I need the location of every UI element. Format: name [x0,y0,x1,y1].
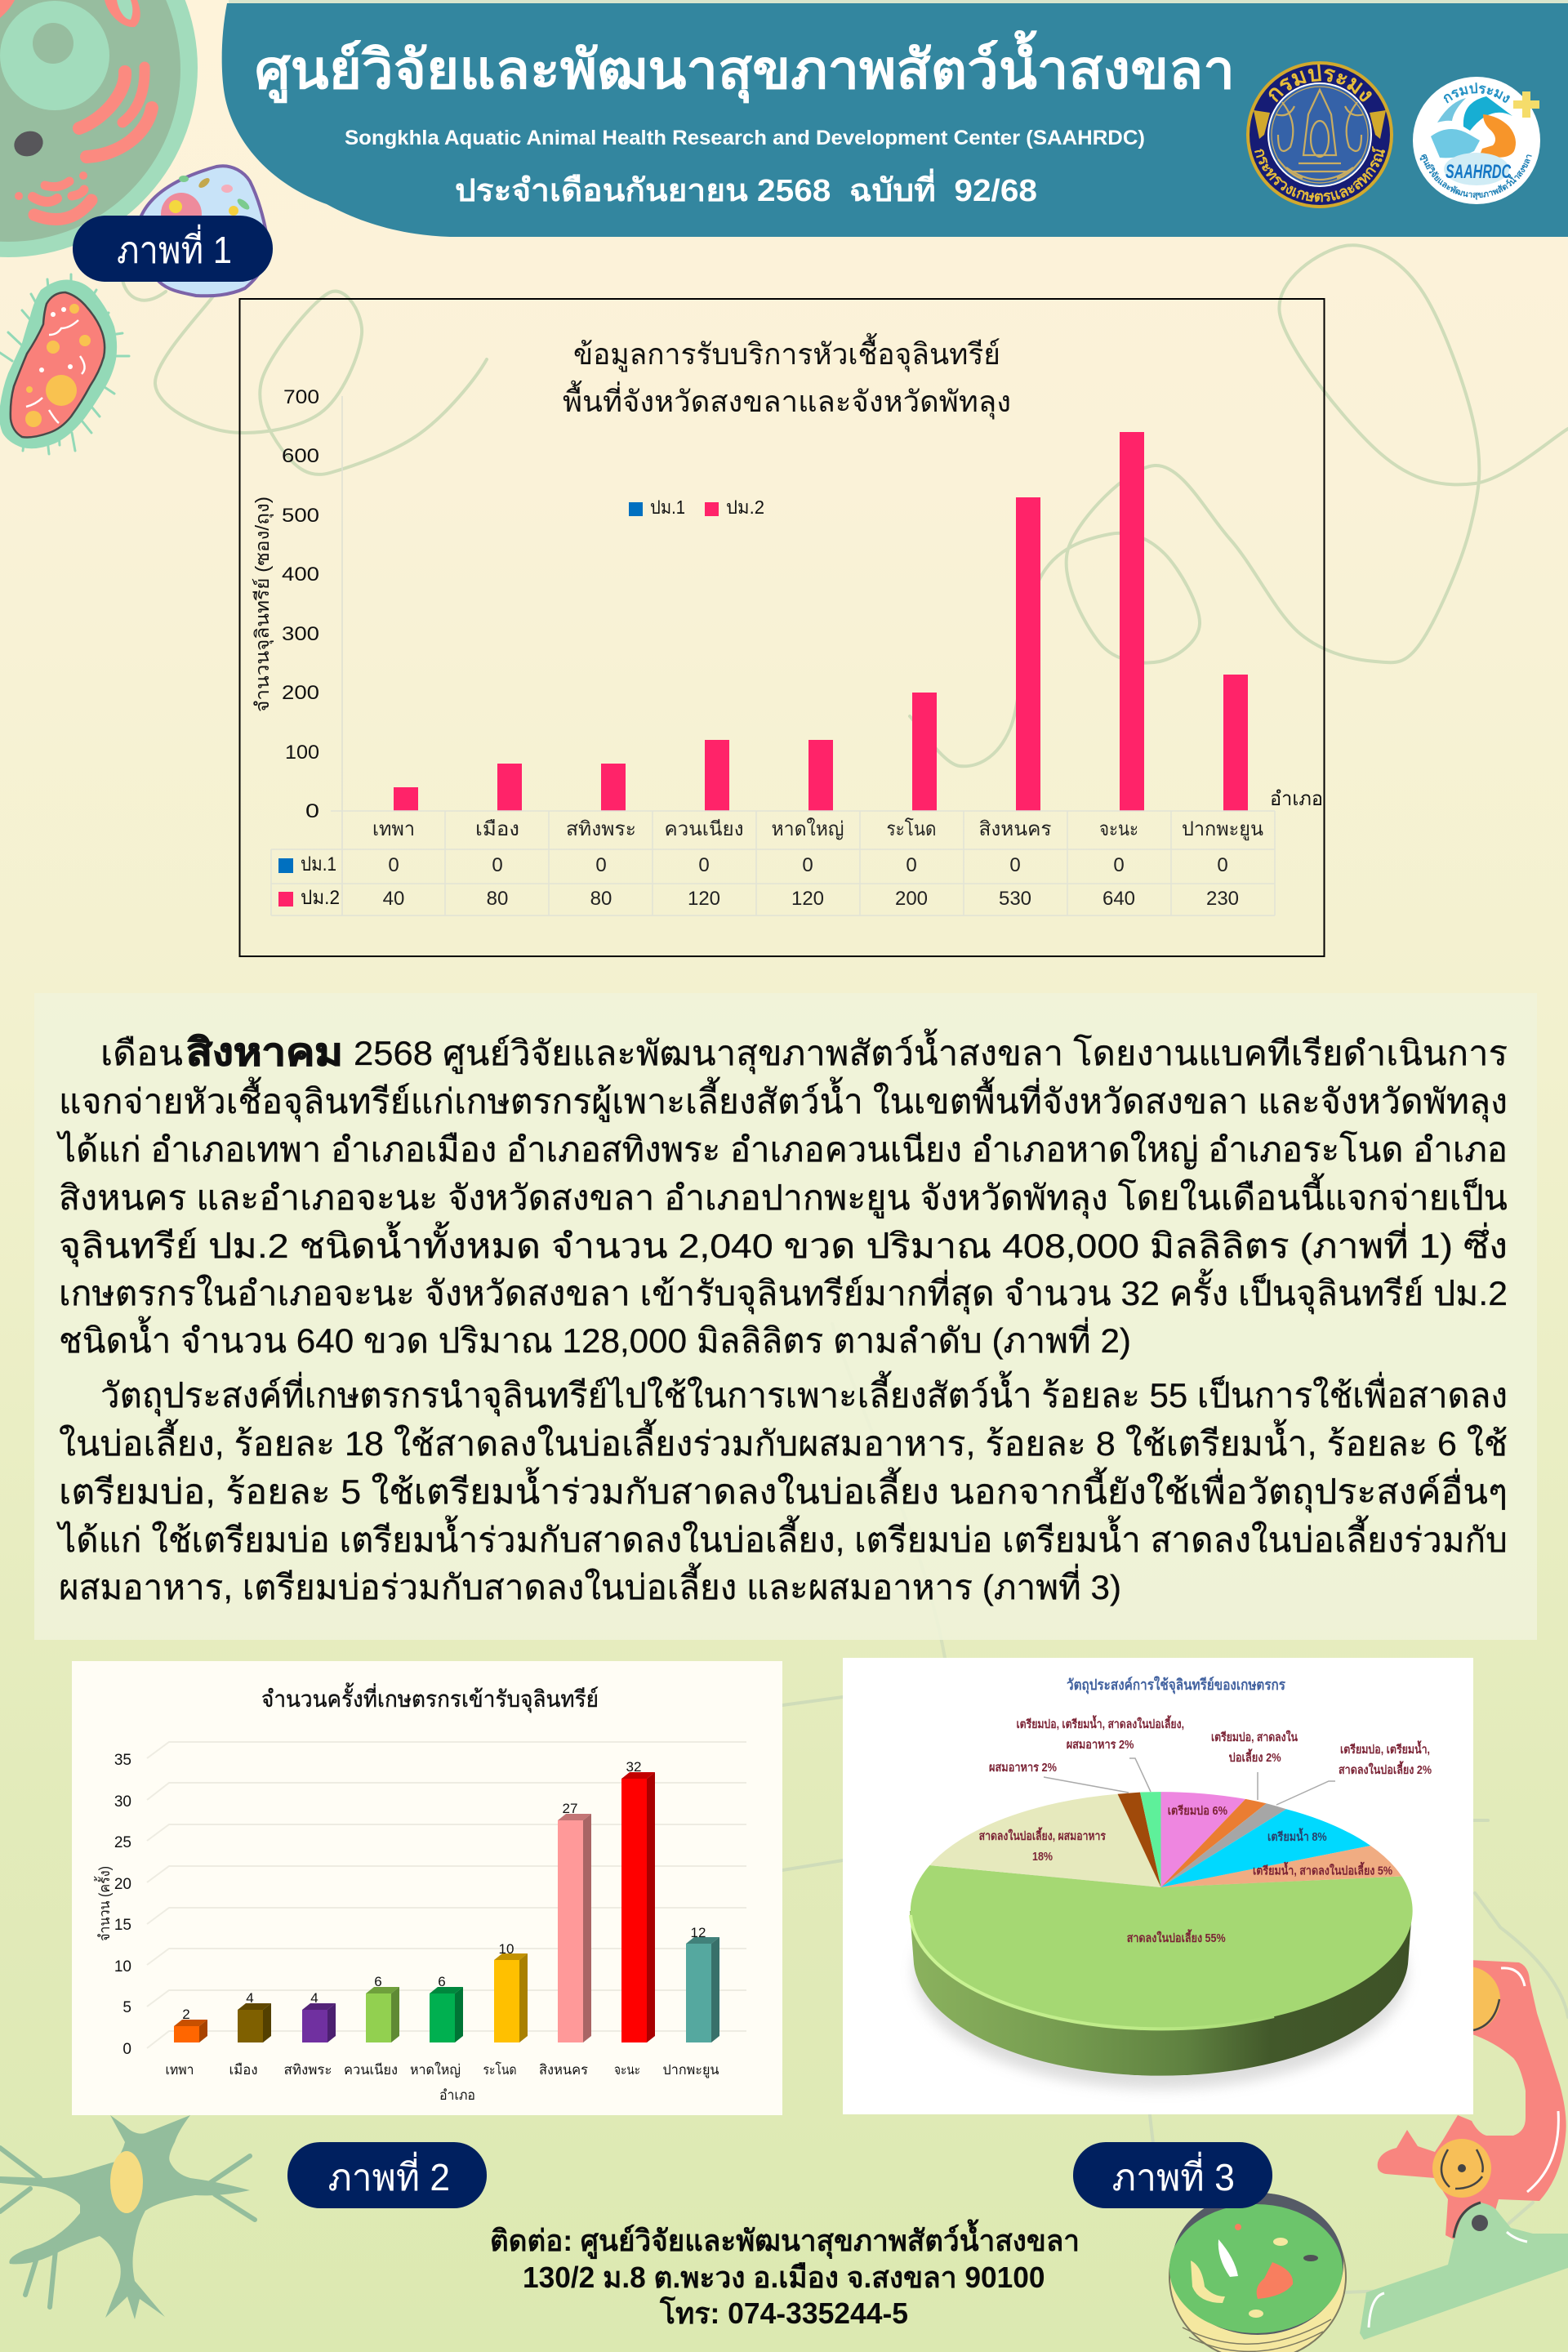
pie labels: สาดลงในบ่อเลี้ยง 55% [1127,1929,1226,1945]
chart 1 data table: 40 [383,888,404,910]
pie labels: เตรียมน้ำ 8% [1267,1828,1327,1844]
label pill: figure 2: ภาพที่ 2 [328,2151,450,2198]
chart 2 category labels: ปากพะยูน [663,2062,719,2078]
contact footer: โทร: 074-335244-5 [659,2296,908,2330]
header top line [229,0,1568,3]
text block: paragraph 1 [56,1028,1508,1360]
chart 1 data table: 200 [895,888,928,910]
text block: paragraph 1: สิงหนคร และอำเภอจะนะ จังหวัดสงขลา อำเภอปากพะยูน จังหวัดพัทลุง โดยในเดือนนี้แจกจ่ายเป็น [59,1173,1508,1219]
text block: paragraph 1: จุลินทรีย์ ปม.2 ชนิดน้ำทั้งหมด จำนวน 2,040 ขวด ปริมาณ 408,000 มิลลิลิตร (ภาพที่ 1) ซึ่ง [59,1221,1508,1267]
header title: ศูนย์วิจัยและพัฒนาสุขภาพสัตว์น้ำสงขลา [255,29,1235,104]
chart 1 title: พื้นที่จังหวัดสงขลาและจังหวัดพัทลุง [563,380,1011,420]
label pill: figure 1 [73,216,273,282]
chart 1 bars [394,432,1248,811]
chart 1 data table: จะนะ [1099,818,1138,840]
logo: SAAHRDC: กรมประมง [1444,82,1510,103]
chart 1 data table: 80 [487,888,508,910]
chart 3 title: วัตถุประสงค์การใช้จุลินทรีย์ของเกษตรกร [1067,1676,1285,1695]
chart 2 y axis labels: 30 [114,1793,131,1811]
text block: paragraph 1: สิงหาคม [186,1031,343,1073]
chart 1 data table: ระโนด [887,817,936,840]
label pill: figure 3 [1073,2142,1272,2208]
label pill: figure 1: ภาพที่ 1 [117,224,232,271]
text block: paragraph 1: ได้แก่ อำเภอเทพา อำเภอเมือง อำเภอสทิงพระ อำเภอควนเนียง อำเภอหาดใหญ่ อำเภอระโนด อำเภอ [56,1129,1508,1169]
chart 1 data table: 530 [999,888,1031,910]
logo: SAAHRDC: SAAHRDC [1446,161,1511,183]
chart 2 title: จำนวนครั้งที่เกษตรกรเข้ารับจุลินทรีย์ [261,1682,599,1713]
pie labels: ผสมอาหาร 2% [1067,1739,1134,1752]
chart 2 value labels: 10 [499,1941,514,1957]
text block: paragraph 2 [56,1370,1508,1606]
chart 1 title: ข้อมูลการรับบริการหัวเชื้อจุลินทรีย์ [573,332,1000,372]
contact footer: 130/2 ม.8 ต.พะวง อ.เมือง จ.สงขลา 90100 [523,2261,1045,2294]
chart 1 data table: หาดใหญ่ [771,817,844,840]
chart 2 value labels: 6 [438,1974,446,1989]
decoration: neuron nucleus [110,2151,143,2213]
chart 1 data table: 0 [492,854,503,876]
contact footer: ติดต่อ: ศูนย์วิจัยและพัฒนาสุขภาพสัตว์น้ำสงขลา [490,2219,1080,2260]
chart 1 y axis: 0 [305,800,319,822]
pie labels: 18% [1032,1851,1053,1864]
chart 1 y axis: 100 [285,742,319,764]
pie labels: ผสมอาหาร 2% [989,1762,1057,1775]
chart 2 category labels: ควนเนียง [344,2062,398,2078]
chart 1 data table: ควนเนียง [665,818,743,840]
decoration: animal cell [138,166,268,296]
panel: body text background [34,993,1537,1640]
chart 1 y axis: 200 [282,682,319,704]
decoration: neuron bottom left [0,2115,255,2319]
chart 1 y axis: 300 [282,623,319,645]
chart 2 category labels [165,2061,719,2103]
decoration: microscope [1360,1960,1568,2340]
chart 2 value labels [182,1759,706,2022]
chart 1 title [563,332,1011,420]
text block: paragraph 1: 2568 ศูนย์วิจัยและพัฒนาสุขภาพสัตว์น้ำสงขลา โดยงานแบคทีเรียดำเนินการ [354,1028,1508,1075]
pie labels: สาดลงในบ่อเลี้ยง 2% [1339,1761,1432,1777]
text block: paragraph 2: เตรียมบ่อ, ร้อยละ 5 ใช้เตรียมน้ำร่วมกับสาดลงในบ่อเลี้ยง นอกจากนี้ยังใช้เพื่อวัตถุประสงค์อื่นๆ [59,1467,1508,1513]
chart 2 value labels: 4 [310,1990,318,2006]
chart 1 data table [271,811,1275,915]
chart 1 data table: ปม.2 [301,887,340,909]
logo: SAAHRDC: ศูนย์วิจัยและพัฒนาสุขภาพสัตว์น้ำสงขลา [1419,154,1532,200]
chart 1 y axis: จำนวนจุลินทรีย์ (ซอง/ถุง) [252,497,274,712]
chart 1 y axis: 700 [283,386,319,408]
header issue line: ประจำเดือนกันยายน 2568 ฉบับที่ 92/68 [455,168,1037,208]
text block: paragraph 1: ชนิดน้ำ จำนวน 640 ขวด ปริมาณ 128,000 มิลลิลิตร ตามลำดับ (ภาพที่ 2) [59,1316,1131,1360]
chart 2 grid [147,1742,746,2048]
chart 1 y axis: 400 [282,564,319,586]
chart 1 y axis [252,386,342,915]
chart 2 category labels: สทิงพระ [284,2062,332,2078]
text block: paragraph 2: ผสมอาหาร, เตรียมบ่อร่วมกับสาดลงในบ่อเลี้ยง และผสมอาหาร (ภาพที่ 3) [59,1562,1121,1606]
header subtitle: Songkhla Aquatic Animal Health Research and Development Center (SAAHRDC) [345,127,1145,149]
chart 1 data table: 120 [688,888,720,910]
chart 2 value labels: 27 [563,1801,577,1816]
chart 1 legend [629,497,764,518]
chart 2 y axis labels: 20 [114,1876,131,1893]
contact footer [490,2219,1080,2330]
pie labels [979,1715,1432,1945]
logo: SAAHRDC [1413,77,1540,204]
chart 1 data table: 640 [1102,888,1135,910]
chart 1 data table: ปม.1 [301,853,336,875]
text block: paragraph 2: วัตถุประสงค์ที่เกษตรกรนำจุลินทรีย์ไปใช้ในการเพาะเลี้ยงสัตว์น้ำ ร้อยละ 55 เป็นการใช้เพื่อสาดลง [100,1370,1508,1417]
chart 2 category labels: จะนะ [614,2062,640,2078]
decoration: bacterium [0,274,129,454]
chart 2 y axis labels: 35 [114,1752,131,1769]
chart 1 data table: 0 [906,854,917,876]
chart 2 category labels: เมือง [229,2062,258,2078]
text block: paragraph 2: ในบ่อเลี้ยง, ร้อยละ 18 ใช้สาดลงในบ่อเลี้ยงร่วมกับผสมอาหาร, ร้อยละ 8 ใช้เตรียมน้ำ, ร้อยละ 6 ใช้ [59,1419,1508,1463]
pie labels: สาดลงในบ่อเลี้ยง, ผสมอาหาร [979,1827,1106,1843]
decoration: large cell top left [0,0,198,257]
label pill: figure 3: ภาพที่ 3 [1112,2151,1235,2198]
chart 2 category labels: เทพา [165,2062,194,2078]
chart 1 data table: 0 [1217,854,1228,876]
chart 1 data table: 0 [698,854,710,876]
chart 1 data table: เมือง [475,818,519,840]
chart 1 data table: 0 [1009,854,1021,876]
chart 2 y axis labels: 0 [122,2041,131,2058]
text block: paragraph 2: ได้แก่ ใช้เตรียมบ่อ เตรียมน้ำร่วมกับสาดลงในบ่อเลี้ยง, เตรียมบ่อ เตรียมน้ำ สาดลงในบ่อเลี้ยงร่วมกับ [56,1515,1508,1559]
label pill: figure 2 [287,2142,487,2208]
text block: paragraph 1: เดือน [100,1034,183,1072]
chart 1 data table: 0 [1113,854,1125,876]
header banner [222,3,1568,237]
chart 1 data table: สทิงพระ [566,818,636,840]
chart 2 value labels: 2 [182,2007,190,2022]
chart 2 category labels: สิงหนคร [539,2062,588,2078]
chart 1 data table: 0 [595,854,607,876]
chart 1 data table: สิงหนคร [978,818,1052,840]
chart 1 legend: ปม.2 [726,497,764,518]
chart 1 data table: 230 [1206,888,1239,910]
chart 1 legend: ปม.1 [650,497,685,518]
chart 1 data table: 0 [388,854,399,876]
chart 1 x axis title: อำเภอ [1270,788,1323,810]
chart 1 data table: 120 [791,888,824,910]
panel: chart 3 pie [843,1658,1473,2114]
pie labels: เตรียมบ่อ, เตรียมน้ำ, [1340,1740,1430,1757]
chart 2 y axis labels: 10 [114,1958,131,1976]
decoration: petri dish [1169,2193,1346,2352]
chart 1 y axis: 600 [282,445,319,467]
chart 1 data table: 0 [802,854,813,876]
chart 2 y axis labels: 25 [114,1834,131,1851]
text block: paragraph 1: แจกจ่ายหัวเชื้อจุลินทรีย์แก่เกษตรกรผู้เพาะเลี้ยงสัตว์น้ำ ในเขตพื้นที่จังหวัดสงขลา และจังหวัดพัทลุง [59,1076,1508,1123]
chart 1 y axis: 500 [282,505,319,527]
chart 2 y axis labels: จำนวน (ครั้ง) [94,1866,113,1941]
chart 1 data table: เทพา [372,818,415,840]
chart 2 y axis labels: 15 [114,1917,131,1934]
logo: department of fisheries seal: กระทรวงเกษตรและสหกรณ์ [1254,145,1385,203]
text block: paragraph 1: เกษตรกรในอำเภอจะนะ จังหวัดสงขลา เข้ารับจุลินทรีย์มากที่สุด จำนวน 32 ครั้ง เป็นจุลินทรีย์ ปม.2 [59,1268,1508,1315]
pie labels: เตรียมบ่อ, สาดลงใน [1211,1730,1298,1744]
chart 1 data table: ปากพะยูน [1182,818,1263,841]
chart 2 value labels: 32 [626,1759,641,1775]
chart 2 category labels: อำเภอ [439,2087,475,2103]
chart 2 y axis labels [94,1752,131,2058]
panel: chart 2 3D bars [72,1661,782,2115]
pie labels: เตรียมบ่อ, เตรียมน้ำ, สาดลงในบ่อเลี้ยง, [1016,1715,1184,1731]
chart 2 value labels: 4 [246,1990,254,2006]
chart 1 data table: 80 [590,888,612,910]
chart 2 bars [174,1772,719,2042]
chart 2 category labels: ระโนด [483,2061,516,2078]
panel: chart 1 frame and bar chart [240,299,1325,956]
logo: department of fisheries seal: กรมประมง [1269,64,1372,103]
pie leader lines [1044,1758,1335,1805]
pie labels: บ่อเลี้ยง 2% [1229,1748,1281,1765]
logo: department of fisheries seal [1246,61,1393,208]
chart 2 y axis labels: 5 [122,1999,131,2016]
pie labels: เตรียมบ่อ 6% [1168,1804,1227,1818]
chart 2 value labels: 6 [374,1974,382,1989]
chart 2 category labels: หาดใหญ่ [410,2061,461,2078]
chart 2 value labels: 12 [691,1925,706,1940]
pie chart 3D [910,1792,1413,2089]
pie labels: เตรียมน้ำ, สาดลงในบ่อเลี้ยง 5% [1253,1862,1392,1878]
